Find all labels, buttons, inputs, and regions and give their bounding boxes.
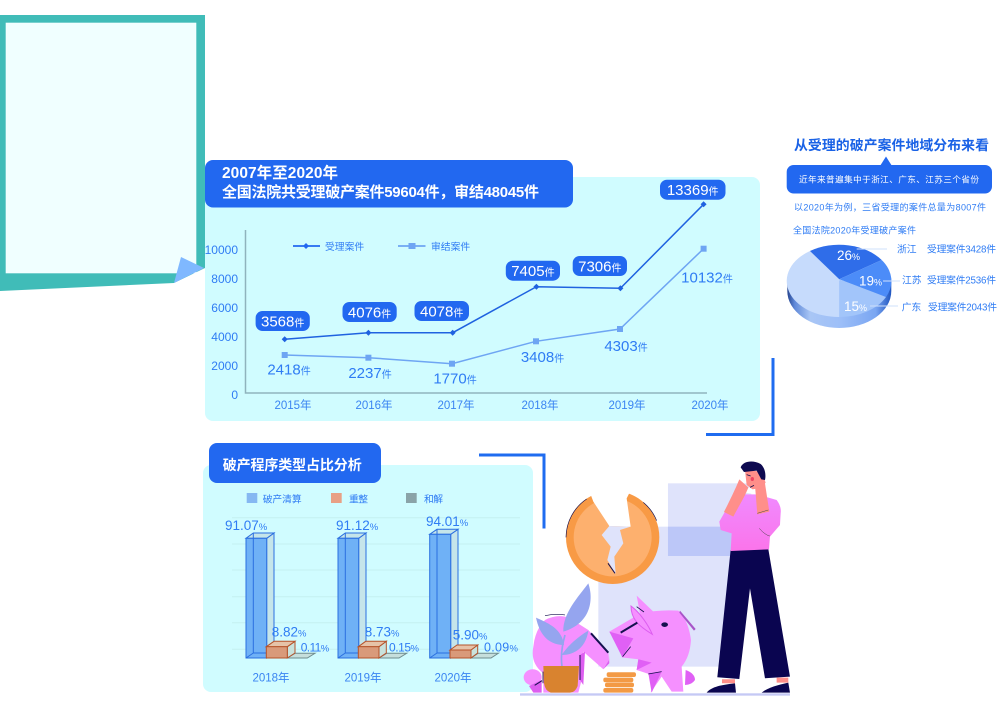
heading: procedure types: 破产程序类型占比分析: [223, 457, 362, 473]
bars 2018: [246, 533, 315, 658]
concluded value labels: [267, 270, 733, 388]
person: [707, 462, 790, 693]
pie chart: 26%: [837, 248, 860, 263]
bars 2019: [338, 533, 407, 658]
panel: case trend line chart: [205, 160, 760, 421]
pie chart: 15%: [844, 299, 867, 314]
y axis labels: 4000: [211, 330, 238, 344]
bar year labels: 2020年: [434, 670, 472, 684]
illustration: worried person with broken piggy bank: [520, 462, 790, 696]
pie labels: [897, 242, 997, 314]
concluded value labels: 2418件: [267, 362, 311, 378]
bar year labels: [252, 670, 472, 684]
torso: [719, 494, 781, 551]
arms: [724, 479, 748, 517]
legend: 受理案件: [325, 240, 364, 253]
pie labels: 受理案件3428件: [927, 242, 996, 256]
bar value labels: [225, 514, 519, 654]
bar value labels: 8.82%: [272, 624, 307, 640]
heading: regional distribution: 从受理的破产案件地域分布来看: [794, 137, 989, 153]
floor line: [520, 693, 790, 696]
bar value labels: 91.07%: [225, 518, 268, 533]
x axis year labels: 2016年: [355, 398, 393, 412]
coin stack: [603, 672, 636, 693]
pie labels: 浙江: [897, 244, 917, 256]
legend: 破产清算: [263, 492, 302, 506]
accepted value pills: 3568件: [261, 314, 304, 330]
legend: 审结案件: [431, 240, 470, 253]
heading: procedure types: [209, 443, 381, 483]
x axis year labels: 2015年: [274, 398, 312, 412]
pie labels: 受理案件2043件: [928, 300, 997, 314]
pie chart: [787, 245, 900, 328]
head: [745, 470, 766, 489]
line: accepted cases: [282, 201, 707, 342]
connector line upper: [706, 358, 773, 434]
background rectangles: [598, 483, 751, 667]
chart axes: [246, 230, 707, 393]
y axis labels: 0: [231, 388, 238, 402]
panel: procedure type bars: [203, 443, 533, 692]
x axis year labels: [274, 398, 729, 412]
legend: 和解: [424, 492, 443, 506]
y axis labels: 10000: [205, 243, 238, 257]
broken coin: [566, 488, 659, 584]
bar year labels: 2019年: [344, 670, 382, 684]
pie labels: 广东: [902, 300, 921, 314]
accepted value pills: 7405件: [511, 263, 555, 280]
broken piggy left half: [524, 614, 609, 693]
grid lines: [232, 518, 520, 649]
bar value labels: 0.11%: [301, 640, 330, 654]
heading: cases accepted and concluded: 全国法院共受理破产案件59604件，审结48045件: [222, 183, 539, 201]
panel: regional distribution: [787, 137, 997, 328]
accepted value pills: 4078件: [420, 304, 463, 320]
callout: 近年来普遍集中于浙江、广东、江苏三个省份: [799, 174, 979, 184]
bars 2020: [430, 529, 498, 658]
legend: 重整: [349, 492, 368, 506]
y axis labels: 8000: [211, 272, 238, 286]
x axis year labels: 2017年: [437, 398, 475, 412]
trousers: [717, 549, 790, 679]
pie labels: 江苏: [902, 274, 922, 286]
accepted value pills: 4076件: [348, 304, 391, 322]
pie chart: 19%: [859, 274, 882, 288]
broken piggy right half: [609, 596, 696, 693]
legend: [247, 492, 443, 506]
text: pie caption: 全国法院2020年受理破产案件: [793, 224, 916, 236]
bar value labels: 94.01%: [426, 514, 469, 529]
legend: [293, 240, 470, 253]
neck gap: [745, 486, 756, 494]
accepted value pills: 13369件: [667, 182, 719, 199]
y axis labels: 2000: [211, 359, 238, 373]
line: concluded cases: [282, 246, 707, 367]
connector line lower: [479, 455, 544, 528]
callout: [787, 156, 992, 194]
concluded value labels: 3408件: [521, 349, 564, 366]
concluded value labels: 4303件: [604, 338, 648, 355]
bar value labels: 5.90%: [453, 628, 488, 642]
shoes: [707, 683, 736, 693]
y axis labels: 6000: [211, 301, 238, 315]
concluded value labels: 10132件: [681, 270, 733, 286]
accepted value pills: [256, 180, 726, 331]
potted plant: [536, 583, 591, 693]
bar year labels: 2018年: [252, 670, 290, 684]
bar value labels: 8.73%: [365, 624, 400, 640]
pie labels: 受理案件2536件: [927, 274, 996, 286]
x axis year labels: 2019年: [608, 398, 646, 412]
bar value labels: 0.15%: [389, 640, 420, 654]
empty framed panel top left: [0, 15, 205, 291]
accepted value pills: 7306件: [578, 258, 621, 276]
x axis year labels: 2020年: [691, 398, 729, 412]
x axis year labels: 2018年: [521, 398, 559, 412]
bar value labels: 91.12%: [336, 518, 379, 533]
heading: cases accepted and concluded: 2007年至2020年: [222, 163, 338, 182]
bar value labels: 0.09%: [484, 640, 519, 654]
concluded value labels: 2237件: [348, 365, 392, 382]
heading: cases accepted and concluded: [205, 160, 573, 208]
concluded value labels: 1770件: [433, 370, 477, 388]
y axis labels: [205, 243, 238, 402]
text: 2020 example: 以2020年为例，三省受理的案件总量为8007件: [794, 202, 986, 212]
